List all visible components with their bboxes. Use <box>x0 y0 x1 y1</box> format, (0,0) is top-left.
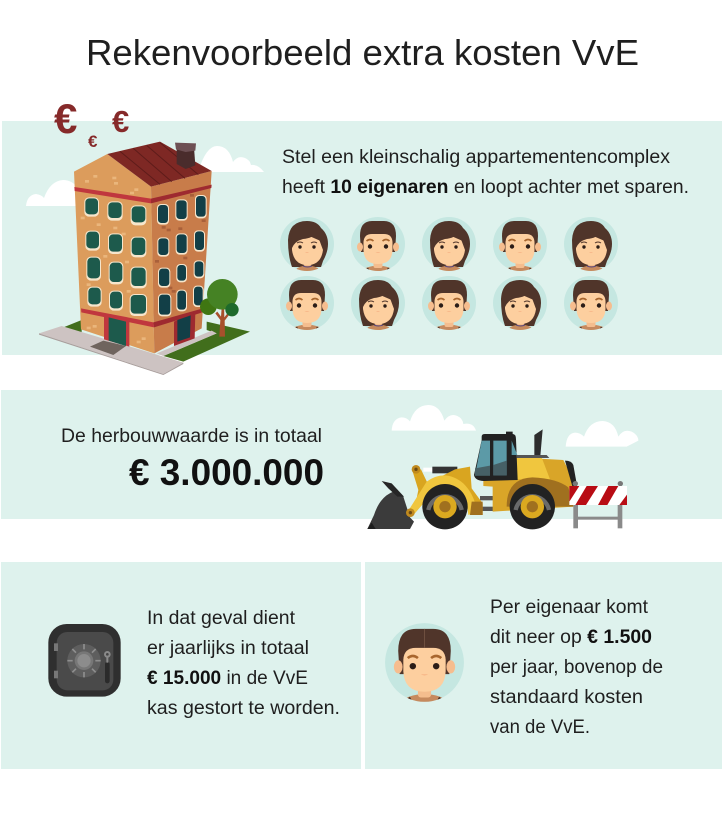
text: yearly total: kas gestort te worden. <box>147 698 340 719</box>
owner 3 <box>422 217 476 271</box>
text: intro: heeft 10 eigenaren en loopt achter met sparen. <box>282 177 689 198</box>
title: Rekenvoorbeeld extra kosten VvE <box>86 32 639 73</box>
walls <box>74 154 154 353</box>
text: yearly total: er jaarlijks in totaal <box>147 638 309 659</box>
icon: wheel loader with clouds and barrier <box>367 405 638 529</box>
owner 8 <box>422 276 476 330</box>
clouds <box>392 405 638 447</box>
text: cost per owner: Per eigenaar komt <box>490 597 649 618</box>
owner 2 <box>351 217 405 271</box>
text: cost per owner: dit neer op € 1.500 <box>490 627 652 648</box>
panel: building and owners <box>2 95 722 375</box>
owner 10 <box>564 276 618 330</box>
rear wheel <box>510 484 555 529</box>
text: cost per owner: standaard kosten <box>490 687 643 708</box>
ground and pavement <box>63 320 250 362</box>
panel: yearly total <box>1 562 361 769</box>
boom <box>432 467 457 473</box>
owner 1 <box>280 217 334 271</box>
fender <box>507 477 573 507</box>
text: yearly total <box>147 608 340 719</box>
text: intro: Stel een kleinschalig appartementencomplex <box>282 147 671 168</box>
icon: owner portrait <box>385 623 464 702</box>
tree <box>215 303 229 337</box>
icon: apartment building <box>39 142 250 375</box>
owner 6 <box>280 276 334 330</box>
text: cost per owner <box>490 597 663 738</box>
windows frames <box>84 195 207 316</box>
cornice stripes <box>74 187 151 203</box>
text: yearly total: In dat geval dient <box>147 608 296 629</box>
text: rebuild value amount: € 3.000.000 <box>129 452 324 493</box>
body <box>483 457 573 512</box>
exhaust <box>534 429 543 456</box>
text: cost per owner: per jaar, bovenop de <box>490 657 663 678</box>
roof <box>107 142 212 187</box>
icon: euro signs: € <box>88 132 98 151</box>
panel: cost per owner <box>365 562 722 769</box>
chimney <box>177 147 195 169</box>
owner 9 <box>493 276 547 330</box>
text: intro <box>282 147 689 198</box>
owner 5 <box>564 217 618 271</box>
icon: safe <box>48 624 121 697</box>
icon: clouds behind building <box>26 146 264 206</box>
bricks <box>81 175 146 343</box>
bars <box>480 496 495 500</box>
icon: euro signs: € <box>54 95 77 142</box>
icon: euro signs: € <box>112 104 129 139</box>
front wheel <box>422 484 468 529</box>
text: yearly total: € 15.000 in de VvE <box>147 668 308 689</box>
panel: rebuild value <box>1 390 722 529</box>
owner 7 <box>351 276 405 330</box>
icon: euro signs <box>54 95 129 151</box>
owner 4 <box>493 217 547 271</box>
barrier <box>573 481 578 486</box>
text: rebuild value label: De herbouwwaarde is in totaal <box>61 426 322 447</box>
text: cost per owner: van de VvE. <box>490 717 590 738</box>
bucket <box>367 492 414 529</box>
white shaft <box>423 468 435 472</box>
cab <box>474 432 518 481</box>
icon: ten owners <box>280 217 618 330</box>
doors <box>104 314 129 347</box>
